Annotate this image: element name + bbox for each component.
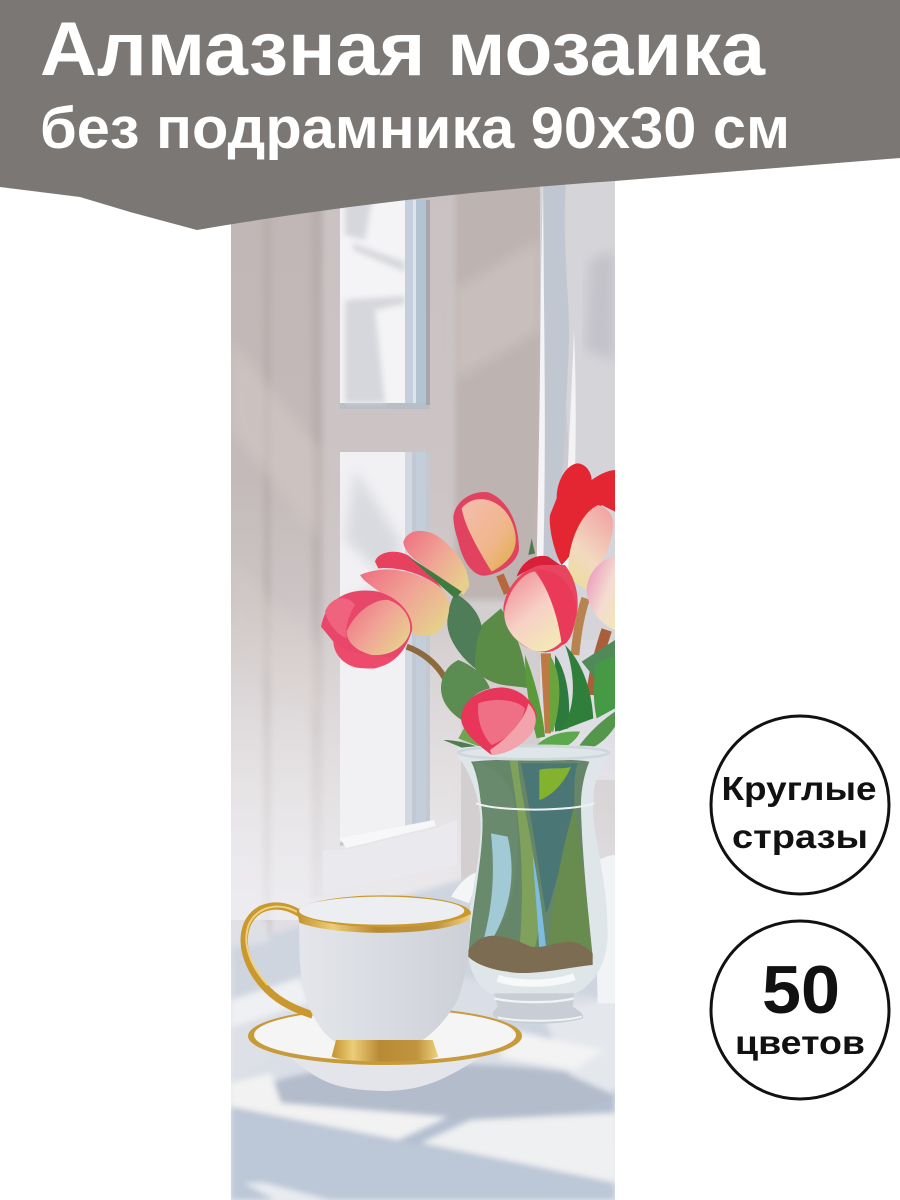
tulip: top center <box>453 492 519 576</box>
tulips <box>321 463 615 755</box>
tulip: yellow-pink <box>403 531 469 595</box>
glass vase <box>458 745 609 1024</box>
badge: round rhinestones <box>711 716 889 894</box>
tulip: back right red <box>550 463 615 565</box>
lower window pane <box>340 452 436 848</box>
window bottom frame <box>450 820 457 838</box>
tulip: left <box>321 591 412 668</box>
tulip: right pale <box>568 505 613 590</box>
stems and leaves (coordinates in 3x zoom units) <box>407 538 615 755</box>
badge: 50 colours <box>711 921 889 1099</box>
teacup <box>244 895 471 1062</box>
badge: round rhinestones: стразы <box>732 818 868 855</box>
subtitle: без подрамника 90х30 см <box>40 96 790 161</box>
tulip: center <box>503 556 578 652</box>
title: Алмазная мозаика <box>40 7 766 92</box>
header banner <box>0 0 900 230</box>
badge: round rhinestones: Круглые <box>722 770 876 807</box>
white lumps beside vase <box>451 855 615 1003</box>
painting: tulips and cup by the window <box>231 170 618 1200</box>
badge: 50 colours: цветов <box>735 1024 865 1061</box>
window sill <box>231 860 618 1200</box>
curtain <box>535 180 615 780</box>
tulip: long pink <box>360 552 462 636</box>
tulip: small low <box>461 687 537 755</box>
tulip: far right <box>587 557 615 630</box>
upper window pane <box>340 200 430 409</box>
badge: 50 colours: 50 <box>762 952 840 1028</box>
saucer <box>248 1007 522 1091</box>
wall and window frame <box>231 170 615 1200</box>
